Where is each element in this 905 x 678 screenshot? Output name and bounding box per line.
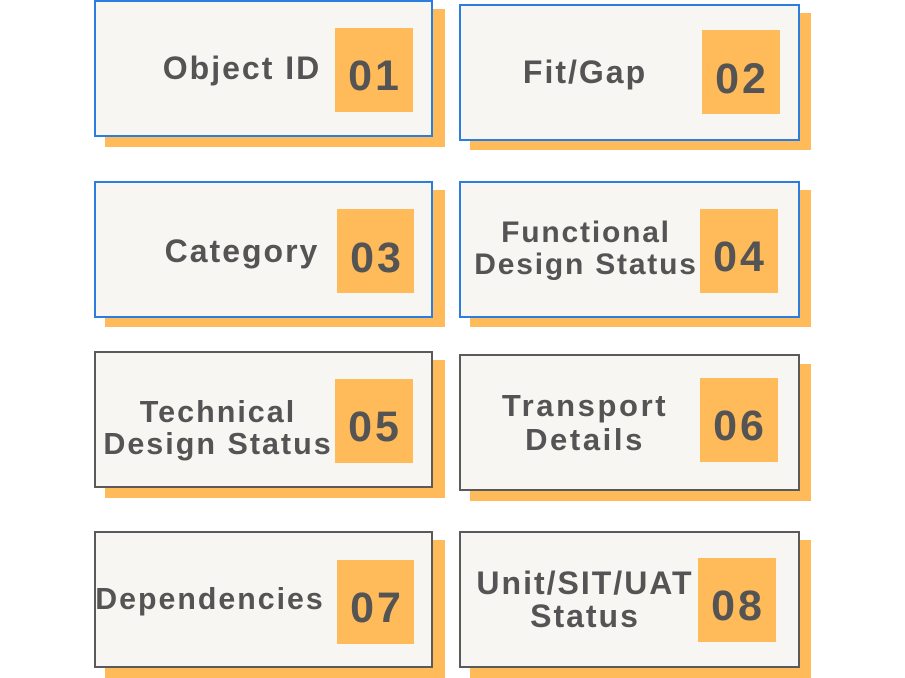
label: Category: Category [165,233,319,269]
number 05: 05 [348,403,402,451]
label: Technical Design Status [103,395,333,461]
card 03: Category [94,181,445,327]
label: Unit/SIT/UAT Status [476,565,694,634]
label: Technical Design Status: Technical [140,395,296,429]
number tile 01 [335,28,413,112]
label: Functional Design Status [474,216,698,281]
label: Unit/SIT/UAT Status: Unit/SIT/UAT [476,565,694,601]
number 02: 02 [715,55,769,103]
number tile 08 [698,558,776,642]
number 04: 04 [713,233,767,281]
number tile 02 [702,30,780,114]
label: Dependencies: Dependencies [95,583,325,616]
card 08: Unit/SIT/UAT Status [459,531,811,678]
number tile 06 [700,378,778,462]
card 01: Object ID [94,0,445,147]
label: Functional Design Status: Functional [501,216,671,249]
card 07: Dependencies [94,531,445,678]
label: Functional Design Status: Design Status [474,248,698,281]
card 05: Technical Design Status [94,351,445,498]
number tile 03 [337,209,414,293]
number 07: 07 [350,584,404,632]
label: Object ID: Object ID [163,50,321,86]
number tile 07 [337,560,414,644]
label: Technical Design Status: Design Status [103,427,333,461]
label: Transport Details: Transport [502,388,668,423]
label: Unit/SIT/UAT Status: Status [530,598,640,634]
label: Transport Details [502,388,668,457]
card 06: Transport Details [459,354,811,501]
number 06: 06 [713,402,767,450]
number 01: 01 [348,52,402,100]
number tile 05 [335,379,413,463]
number 03: 03 [350,234,404,282]
card 04: Functional Design Status [459,181,811,327]
number tile 04 [700,209,778,293]
number 08: 08 [711,582,765,630]
label: Fit/Gap: Fit/Gap [523,54,647,90]
label: Transport Details: Details [525,422,645,457]
card 02: Fit/Gap [459,4,811,150]
